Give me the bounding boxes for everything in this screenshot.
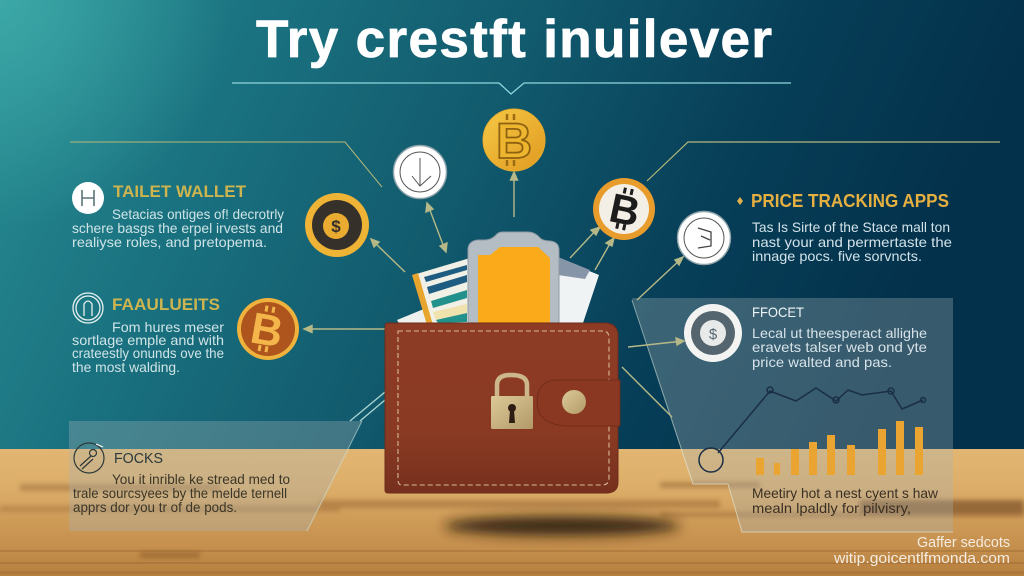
icon: tailet wallet	[72, 182, 104, 214]
top-right connector line	[647, 142, 1000, 181]
coin: top gold bitcoin	[483, 109, 545, 171]
line chart	[699, 387, 926, 472]
text block: tailet wallet: schere basgs the erpel irvests and	[72, 220, 283, 236]
coin: copper bitcoin	[237, 298, 299, 360]
text block: ffocet: eravets talser web ond yte	[752, 339, 927, 355]
icon: padlock	[491, 375, 533, 429]
heading: focks: FOCKS	[114, 450, 163, 467]
icon: faauleuits	[73, 293, 103, 323]
documents behind wallet	[397, 257, 599, 325]
background wall	[0, 0, 1024, 450]
panel: focks	[69, 421, 362, 531]
text block: price tracking apps	[752, 219, 952, 264]
icon: heading diamond	[737, 197, 743, 205]
text block: price tracking apps: nast your and permertaste the	[752, 234, 952, 250]
text block: tailet wallet: Setacias ontiges of! decrotrly	[112, 206, 284, 222]
wooden table	[0, 449, 1024, 576]
section: faauleuits	[72, 293, 224, 375]
text block: faauleuits: the most walding.	[72, 359, 180, 375]
text block: faauleuits: crateestly onunds ove the	[72, 345, 224, 361]
wallet	[385, 323, 620, 493]
panel: price chart and ffocet	[632, 298, 953, 532]
coin: dark ring coin: $	[331, 217, 341, 236]
text block: chart note	[752, 485, 939, 516]
text block: chart note: Meetiry hot a nest cyent s haw	[752, 485, 939, 501]
text block: ffocet: price walted and pas.	[752, 354, 892, 370]
text block: focks	[73, 471, 290, 515]
icon: ffocet seal: $	[709, 326, 718, 343]
heading: ffocet: FFOCET	[752, 304, 804, 320]
text block: focks: apprs dor you tr of de pods.	[73, 499, 237, 515]
text block: ffocet: Lecal ut theesperact allighe	[752, 325, 927, 341]
top-left connector line	[70, 142, 382, 187]
wallet clasp	[537, 380, 620, 426]
heading: tailet wallet: TAILET WALLET	[113, 182, 247, 201]
coin: white anchor icon	[394, 146, 446, 198]
coin: orange-rimmed black bitcoin	[593, 178, 655, 240]
text block: price tracking apps: innage pocs. five sorvncts.	[752, 248, 922, 264]
coin: orange-rimmed black bitcoin: B	[606, 184, 644, 236]
text block: faauleuits: sortlage emple and with	[72, 332, 224, 348]
phone card with orange screen	[468, 232, 559, 323]
arrows radiating from wallet	[304, 172, 684, 421]
text block: focks: You it inrible ke stread med to	[112, 471, 290, 487]
coin: copper bitcoin: B	[247, 304, 287, 357]
wallet shadow on table	[444, 516, 680, 536]
title: Try crestft inuilever	[256, 10, 772, 69]
section: tailet wallet	[72, 182, 284, 250]
footer credit: witip.goicentlfmonda.com	[833, 550, 1010, 567]
text block: tailet wallet	[72, 206, 284, 250]
title underline with chevron	[232, 83, 791, 94]
coin: dark ring coin	[305, 193, 369, 257]
coin: top gold bitcoin: B	[496, 113, 532, 169]
text block: focks: trale sourcsyees by the melde ternell	[73, 485, 287, 501]
footer credit: Gaffer sedcots	[917, 534, 1010, 551]
icon: focks	[74, 443, 104, 473]
heading: faauleuits: FAAULUEITS	[112, 295, 220, 314]
coin: white right icon	[678, 212, 730, 264]
text block: ffocet	[752, 325, 927, 370]
heading: price tracking apps: PRICE TRACKING APPS	[751, 191, 949, 211]
footer credit	[833, 534, 1010, 567]
icon: ffocet seal	[684, 304, 742, 362]
text block: price tracking apps: Tas Is Sirte of the Stace mall ton	[752, 219, 950, 235]
text block: chart note: mealn lpaldly for pilvisry,	[752, 500, 911, 516]
text block: tailet wallet: realiyse roles, and pretopema.	[72, 234, 267, 250]
section: price tracking apps	[737, 191, 952, 264]
text block: faauleuits	[72, 319, 224, 375]
bar chart	[756, 421, 923, 475]
text block: faauleuits: Fom hures meser	[112, 319, 224, 335]
